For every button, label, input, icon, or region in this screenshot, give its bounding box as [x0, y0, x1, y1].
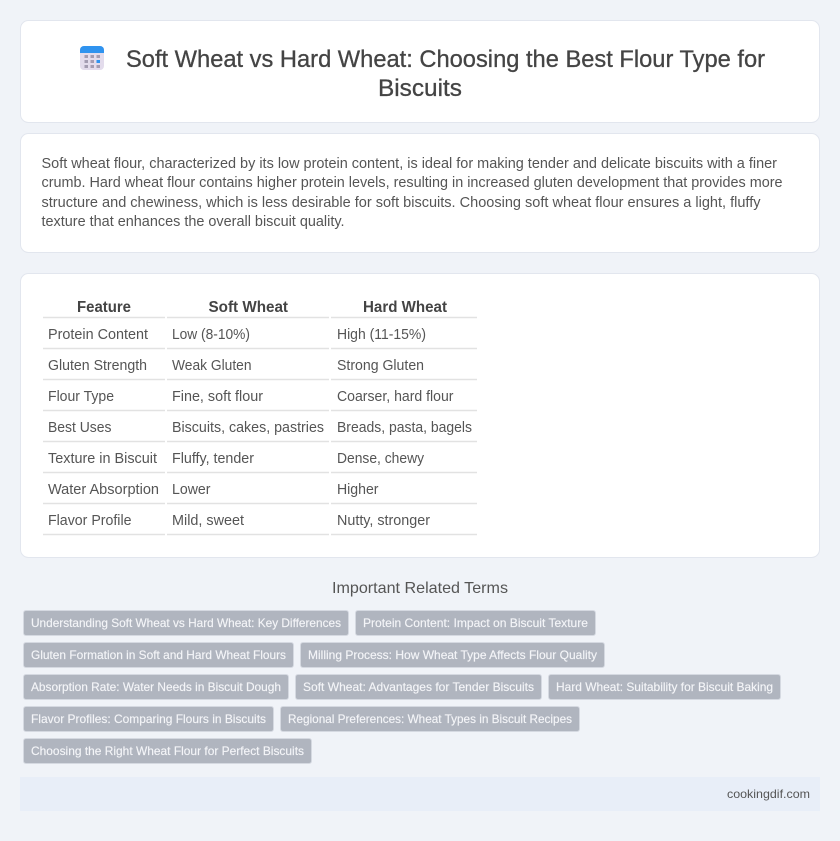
- row: texture in biscuit: Fluffy, tender: [172, 451, 254, 467]
- footer source: cookingdif.com: [727, 787, 810, 801]
- text block: introduction: crumb. Hard wheat flour contains higher protein levels, resulting in increased gluten development that provides more: [42, 175, 782, 191]
- tag: [548, 674, 780, 700]
- tag: [24, 674, 288, 700]
- tag: [24, 738, 312, 764]
- panel: introduction: [20, 134, 820, 252]
- title: [126, 46, 765, 102]
- table header: Feature: [77, 299, 131, 316]
- tag: Understanding Soft Wheat vs Hard Wheat: Key Differences: [31, 616, 341, 630]
- row: texture in biscuit: [48, 451, 425, 467]
- row: flour type: Fine, soft flour: [172, 389, 263, 405]
- tag: Milling Process: How Wheat Type Affects Flour Quality: [308, 648, 597, 662]
- icon: calendar: [80, 46, 104, 70]
- tag: [24, 610, 348, 636]
- tag: Flavor Profiles: Comparing Flours in Biscuits: [31, 712, 266, 726]
- table header: Hard Wheat: [363, 299, 448, 316]
- row: gluten strength: Weak Gluten: [172, 358, 252, 374]
- row: water absorption: Lower: [172, 482, 211, 498]
- tag: [300, 642, 604, 668]
- heading: related terms: Important Related Terms: [332, 580, 508, 597]
- tag: [280, 706, 580, 732]
- row: texture in biscuit: Texture in Biscuit: [48, 451, 157, 467]
- row: flavor profile: Nutty, stronger: [337, 513, 430, 529]
- row: flour type: Flour Type: [48, 389, 114, 405]
- tag: Choosing the Right Wheat Flour for Perfect Biscuits: [31, 744, 304, 758]
- header panel: [20, 20, 820, 122]
- row: water absorption: Water Absorption: [48, 482, 159, 498]
- row: best uses: [48, 420, 472, 436]
- tag: Regional Preferences: Wheat Types in Biscuit Recipes: [288, 712, 572, 726]
- row: protein content: Low (8-10%): [172, 327, 250, 343]
- row: flour type: [48, 389, 454, 405]
- row: best uses: Biscuits, cakes, pastries: [172, 420, 324, 436]
- table header: Soft Wheat: [208, 299, 289, 316]
- text block: introduction: structure and chewiness, which is less desirable for soft biscuits. Choosing soft wheat flour ensures a light, fluffy: [42, 195, 761, 211]
- tag: Protein Content: Impact on Biscuit Texture: [363, 616, 588, 630]
- footer: [20, 777, 820, 811]
- row: flavor profile: Mild, sweet: [172, 513, 244, 529]
- table header: [77, 299, 448, 316]
- row: flour type: Coarser, hard flour: [337, 389, 454, 405]
- text block: introduction: texture that enhances the overall biscuit quality.: [42, 214, 344, 230]
- row: gluten strength: Gluten Strength: [48, 358, 147, 374]
- tag: Soft Wheat: Advantages for Tender Biscuits: [303, 680, 534, 694]
- panel: comparison table: [20, 274, 820, 558]
- title: Biscuits: [378, 75, 462, 102]
- text block: introduction: Soft wheat flour, characterized by its low protein content, is ideal for making tender and delicate biscuits with a finer: [42, 156, 777, 172]
- title: Soft Wheat vs Hard Wheat: Choosing the Best Flour Type for: [126, 46, 765, 73]
- text block: introduction: [42, 156, 782, 230]
- row: water absorption: [48, 482, 379, 498]
- row: best uses: Breads, pasta, bagels: [337, 420, 472, 436]
- tag: [24, 706, 274, 732]
- row: water absorption: Higher: [337, 482, 379, 498]
- row: protein content: High (11-15%): [337, 327, 426, 343]
- tag: [296, 674, 542, 700]
- tags: related terms: [24, 610, 780, 764]
- tag: Absorption Rate: Water Needs in Biscuit Dough: [31, 680, 281, 694]
- row: texture in biscuit: Dense, chewy: [337, 451, 425, 467]
- row: best uses: Best Uses: [48, 420, 112, 436]
- row: flavor profile: [48, 513, 430, 529]
- row: flavor profile: Flavor Profile: [48, 513, 132, 529]
- tag: Hard Wheat: Suitability for Biscuit Baking: [556, 680, 773, 694]
- tag: [356, 610, 596, 636]
- row: gluten strength: [48, 358, 424, 374]
- tag: [24, 642, 294, 668]
- row: protein content: [48, 327, 426, 343]
- row: gluten strength: Strong Gluten: [337, 358, 424, 374]
- row: protein content: Protein Content: [48, 327, 148, 343]
- tag: Gluten Formation in Soft and Hard Wheat Flours: [31, 648, 286, 662]
